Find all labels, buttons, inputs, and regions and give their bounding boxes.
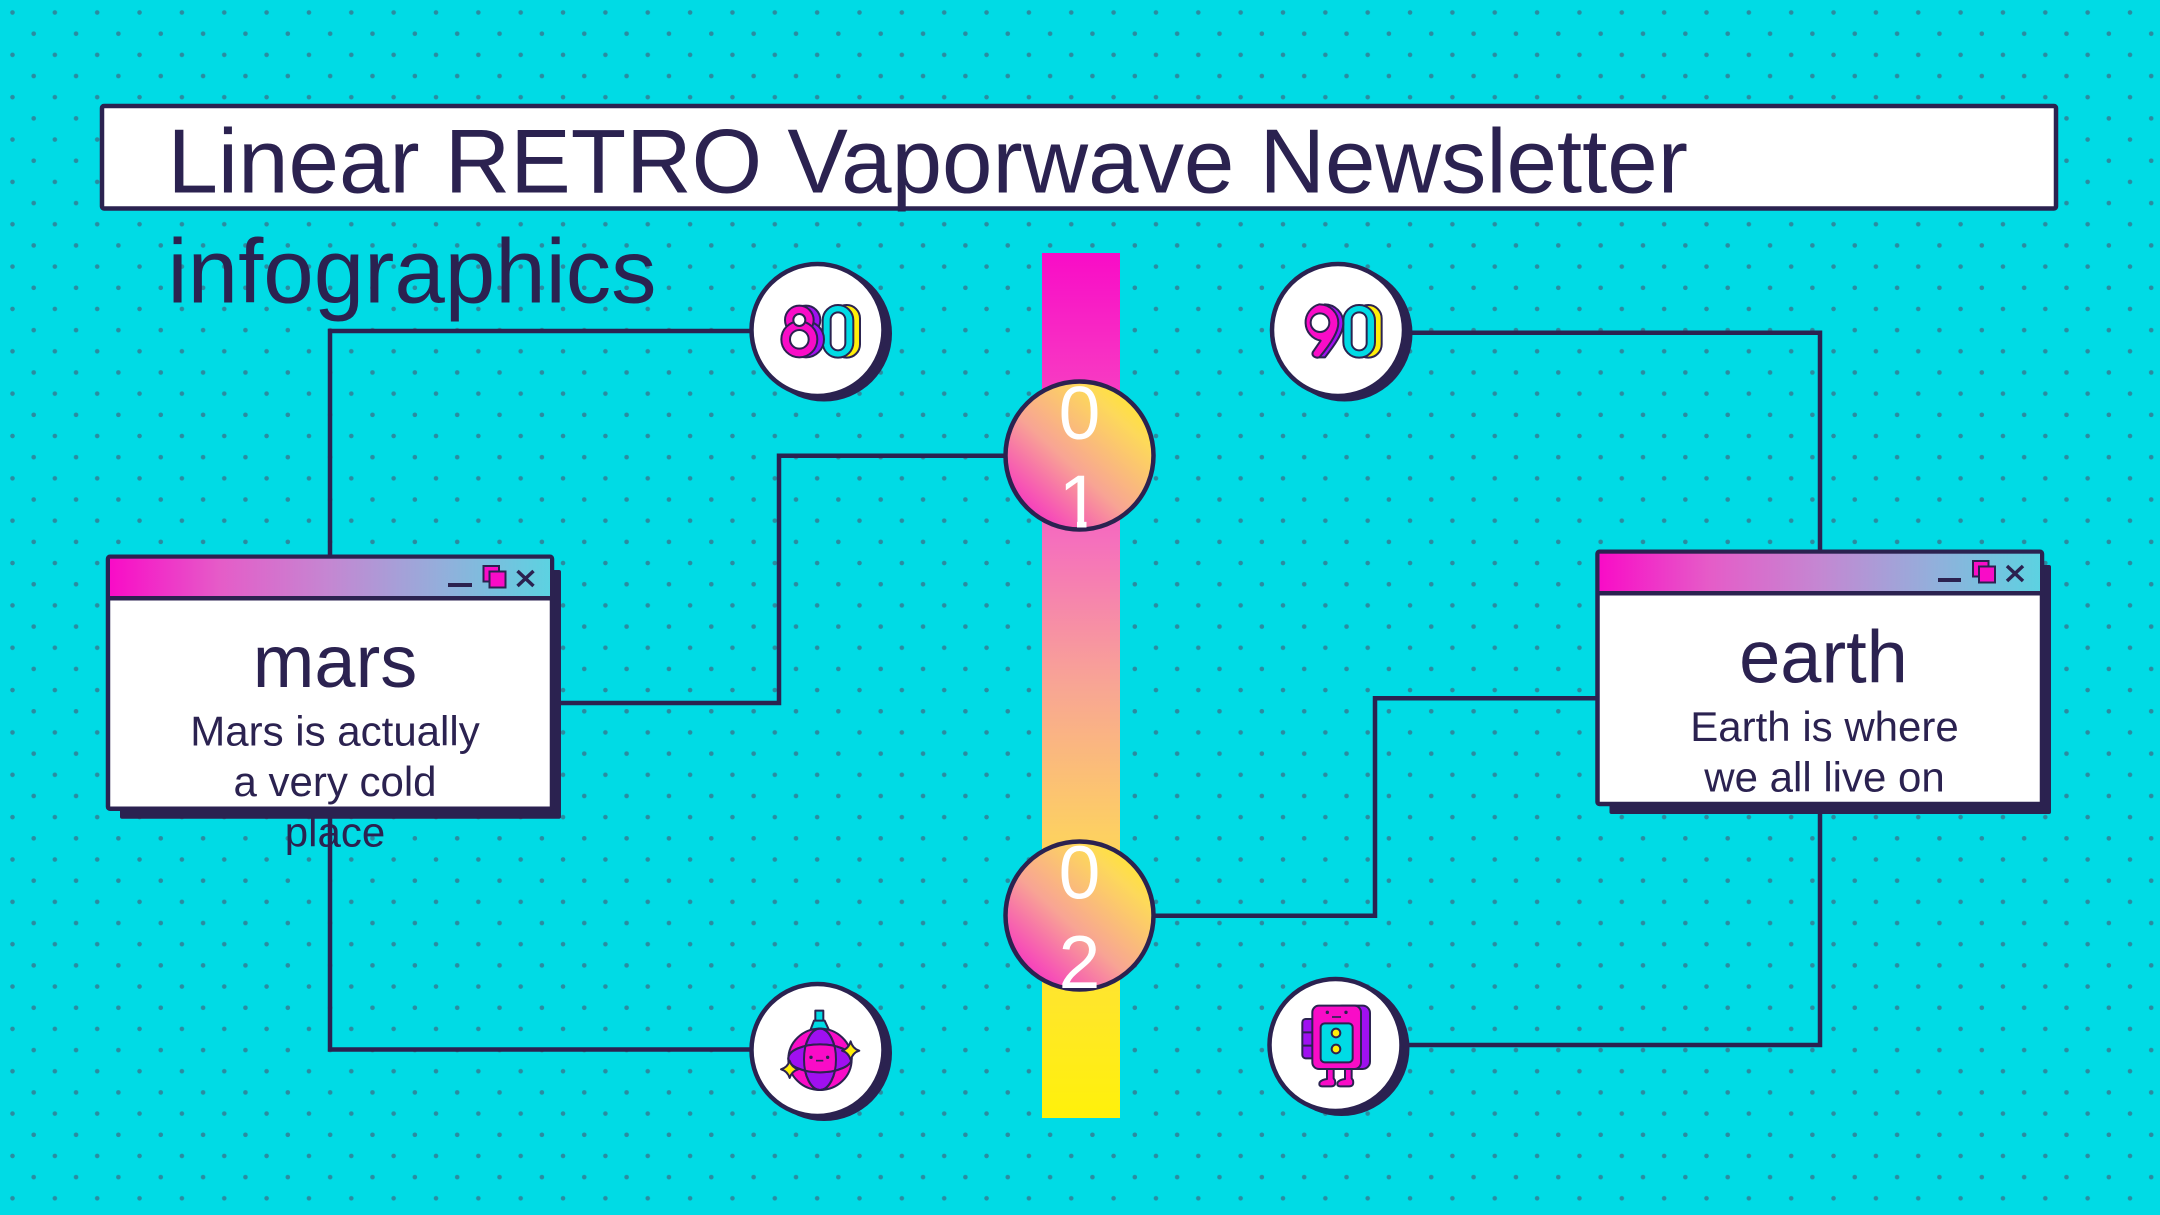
step circle 02: 0 bbox=[1059, 830, 1100, 914]
mars description: a very cold bbox=[233, 758, 437, 805]
earth heading: earth bbox=[1739, 616, 1908, 699]
icon: disco ball badge bbox=[752, 984, 892, 1121]
step circle 02 bbox=[1006, 830, 1154, 1004]
earth window controls bbox=[1938, 561, 2023, 582]
mars description: place bbox=[285, 809, 385, 856]
step circle 01: 1 bbox=[1059, 459, 1100, 543]
icon: 80 badge bbox=[752, 264, 892, 402]
title bbox=[168, 112, 1688, 323]
icon: 90 badge bbox=[1272, 264, 1412, 402]
mars window controls bbox=[448, 566, 534, 588]
panel: mars window bbox=[108, 557, 561, 856]
panel: earth window bbox=[1598, 552, 2051, 814]
icon: robot badge bbox=[1270, 979, 1410, 1116]
earth title bar bbox=[1600, 554, 2040, 591]
mars title bar bbox=[110, 559, 550, 596]
connector lines bbox=[330, 331, 1820, 1050]
title box bbox=[102, 106, 2056, 208]
title: infographics bbox=[168, 222, 656, 323]
step circle 01: 0 bbox=[1059, 371, 1100, 455]
central gradient bar bbox=[1042, 253, 1120, 1118]
mars description: Mars is actually bbox=[190, 707, 480, 754]
earth description bbox=[1690, 703, 1959, 801]
mars description bbox=[190, 707, 480, 856]
earth description: we all live on bbox=[1703, 754, 1945, 801]
title: Linear RETRO Vaporwave Newsletter bbox=[168, 112, 1688, 213]
mars heading: mars bbox=[253, 620, 417, 703]
step circle 01 bbox=[1006, 371, 1154, 543]
step circle 02: 2 bbox=[1059, 920, 1100, 1004]
earth description: Earth is where bbox=[1690, 703, 1959, 750]
